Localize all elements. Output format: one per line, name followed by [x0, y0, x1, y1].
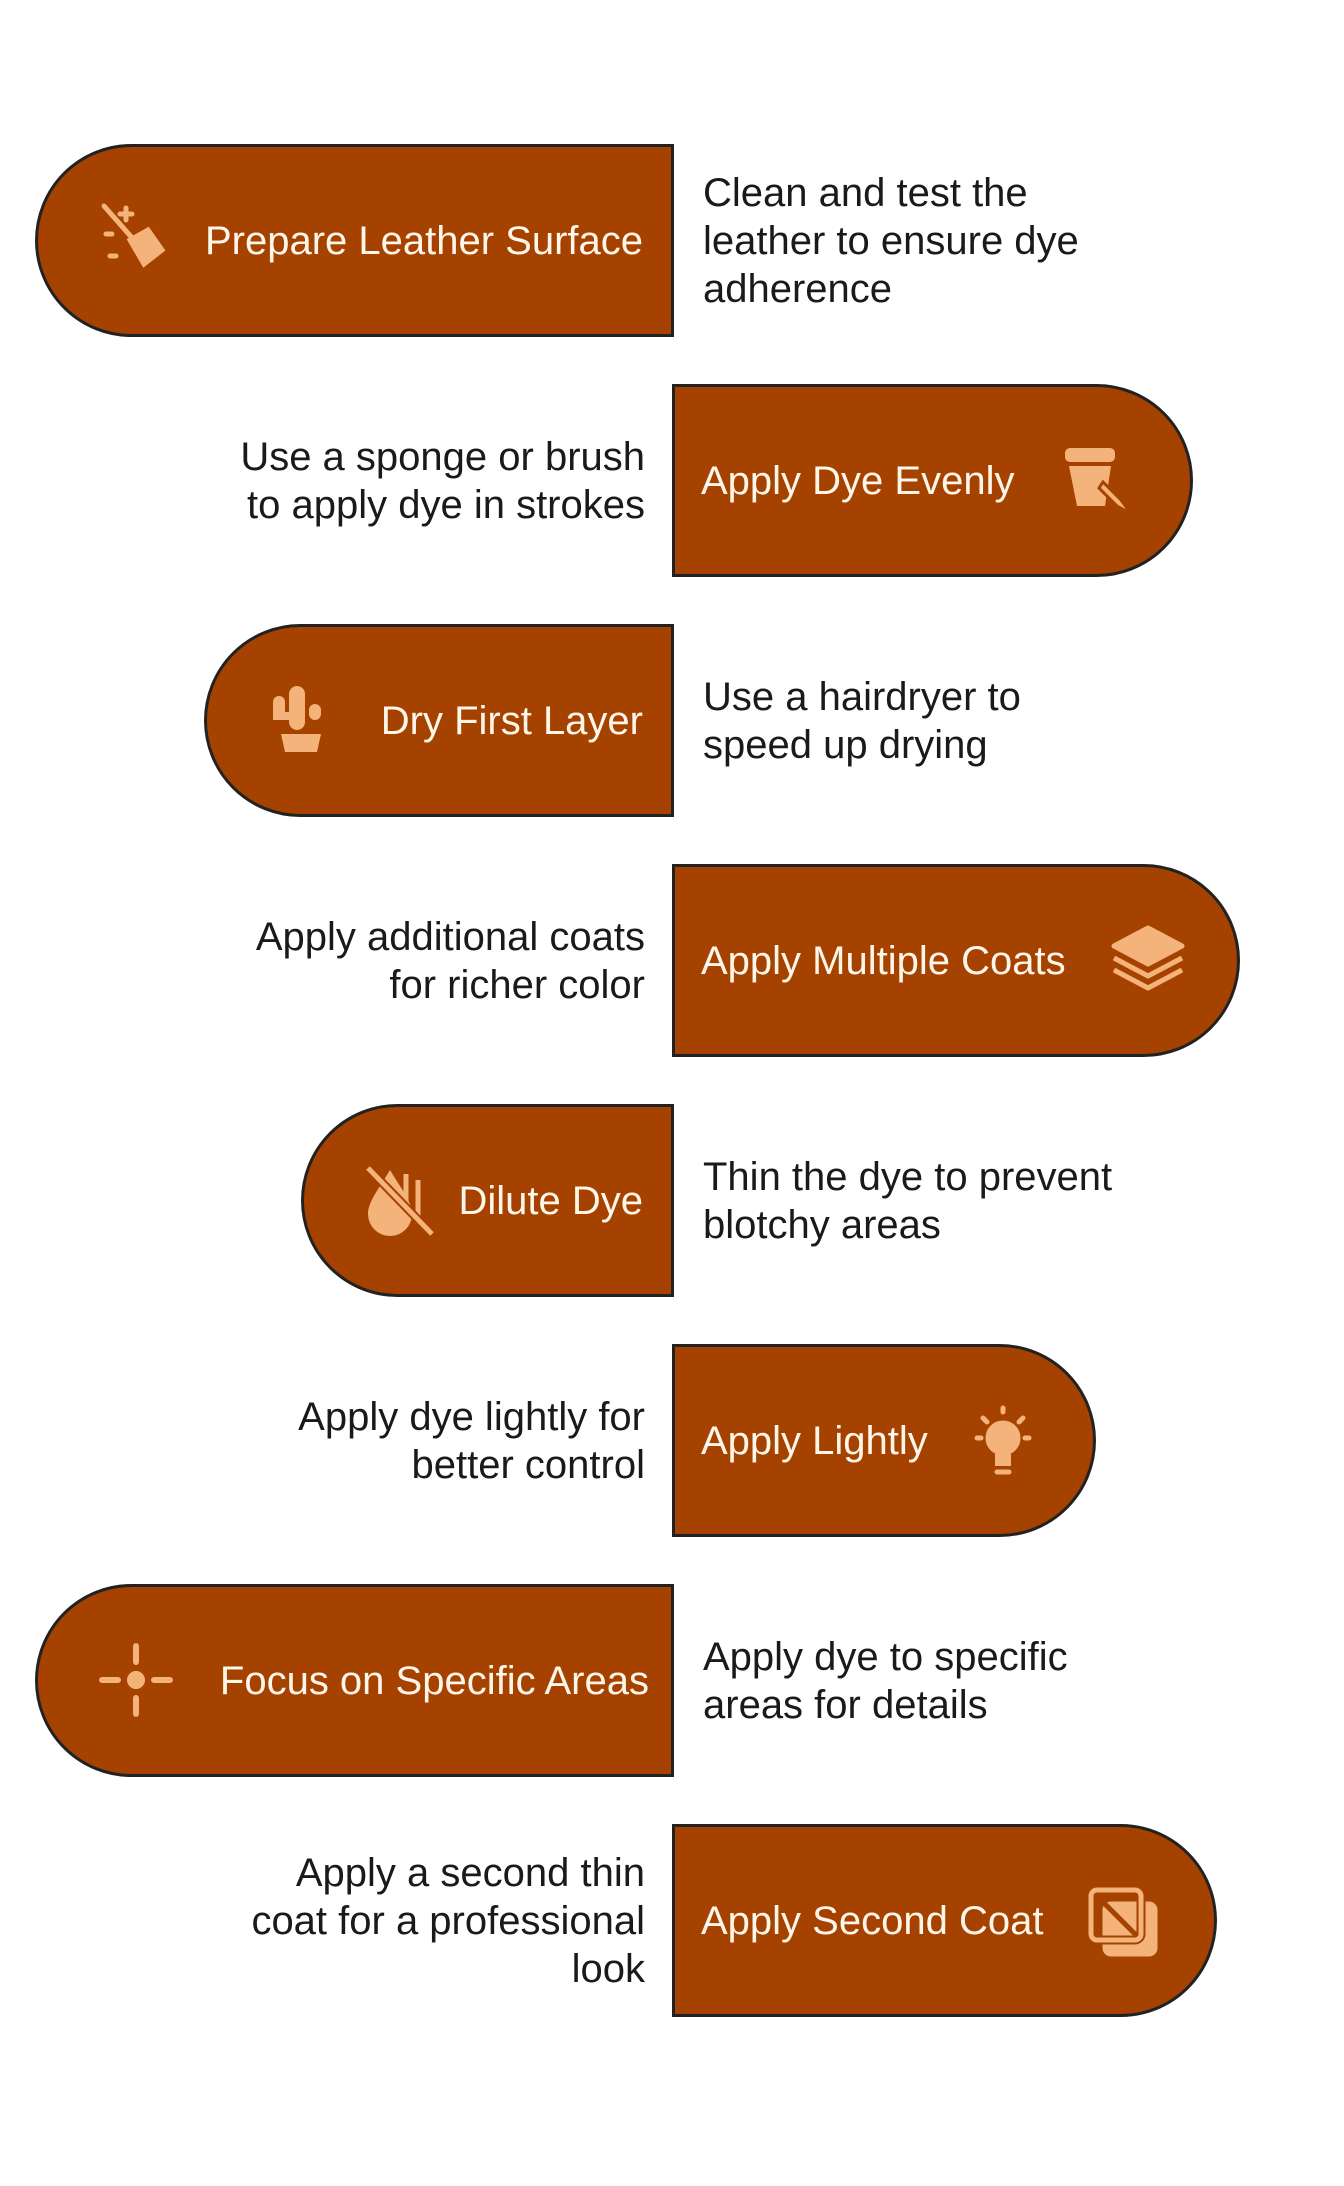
description 3 — [703, 675, 1021, 767]
description 8: coat for a professional — [251, 1899, 645, 1943]
description 6 — [298, 1395, 645, 1487]
description 6: Apply dye lightly for — [298, 1395, 645, 1439]
icon: second layer — [1088, 1888, 1158, 1956]
description 4: Apply additional coats — [256, 915, 645, 959]
description 3: speed up drying — [703, 723, 988, 767]
description 5: blotchy areas — [703, 1203, 941, 1247]
title: Focus on Specific Areas — [220, 1659, 649, 1703]
icon: layers — [1112, 926, 1184, 990]
description 1 — [703, 171, 1079, 311]
description 2: Use a sponge or brush — [240, 435, 645, 479]
description 6: better control — [412, 1443, 645, 1487]
description 7 — [703, 1635, 1068, 1727]
step 7: Focus on Specific Areas — [35, 1584, 674, 1777]
description 1: adherence — [703, 267, 892, 311]
step 3: Dry First Layer — [204, 624, 674, 817]
icon: crossed drop — [366, 1166, 434, 1236]
description 2: to apply dye in strokes — [247, 483, 645, 527]
step 8: Apply Second Coat — [672, 1824, 1217, 2017]
step 1: Prepare Leather Surface — [35, 144, 674, 337]
title: Apply Lightly — [701, 1419, 928, 1463]
step 6: Apply Lightly — [672, 1344, 1096, 1537]
description 5 — [703, 1155, 1112, 1247]
description 1: leather to ensure dye — [703, 219, 1079, 263]
description 7: areas for details — [703, 1683, 988, 1727]
icon: focus crosshair — [99, 1643, 173, 1717]
description 8: Apply a second thin — [296, 1851, 645, 1895]
description 4 — [256, 915, 645, 1007]
icon: sponge brush — [1065, 448, 1126, 510]
description 8 — [251, 1851, 645, 1991]
icon: cactus — [273, 686, 321, 752]
title: Apply Dye Evenly — [701, 459, 1014, 503]
step 5: Dilute Dye — [301, 1104, 674, 1297]
icon: light bulb — [974, 1406, 1032, 1474]
description 3: Use a hairdryer to — [703, 675, 1021, 719]
title: Dry First Layer — [381, 699, 643, 743]
title: Dilute Dye — [458, 1179, 643, 1223]
title: Apply Second Coat — [701, 1899, 1043, 1943]
description 7: Apply dye to specific — [703, 1635, 1068, 1679]
icon: broom — [102, 204, 166, 268]
description 2 — [240, 435, 645, 527]
step 2: Apply Dye Evenly — [672, 384, 1193, 577]
title: Apply Multiple Coats — [701, 939, 1066, 983]
title: Prepare Leather Surface — [205, 219, 643, 263]
description 4: for richer color — [389, 963, 645, 1007]
description 8: look — [572, 1947, 645, 1991]
step 4: Apply Multiple Coats — [672, 864, 1240, 1057]
description 1: Clean and test the — [703, 171, 1028, 215]
description 5: Thin the dye to prevent — [703, 1155, 1112, 1199]
